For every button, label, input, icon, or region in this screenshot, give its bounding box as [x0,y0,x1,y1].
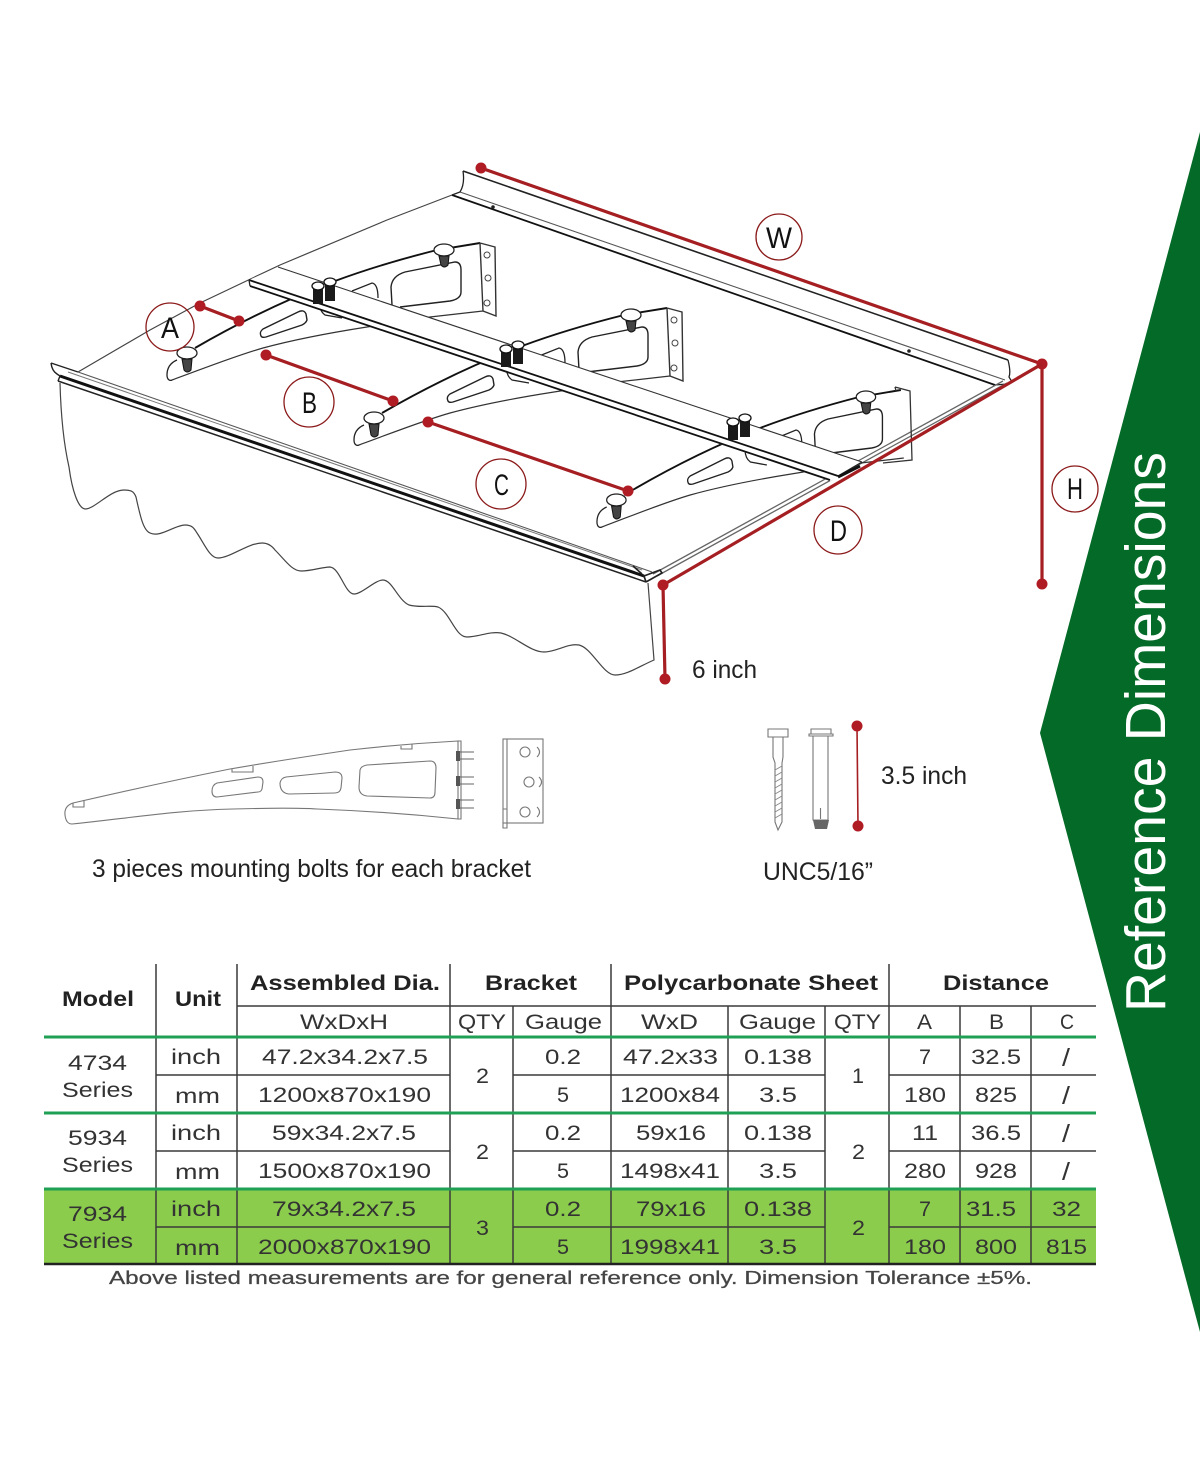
row: 5934 series: 928 [975,1160,1017,1183]
header labels [62,972,1049,1011]
sub-header labels: B [989,1011,1004,1034]
row: 7934 series: 3.5 [759,1236,797,1259]
dimension: 3.5 inch: 3.5 inch [881,762,967,790]
row: 5934 series: / [1062,1158,1070,1186]
dimension C: C [494,469,509,502]
dimension W: W [766,222,793,255]
dimension A [146,300,244,351]
bracket 2 [354,308,683,445]
dimension: 6 inch drop [658,580,757,684]
row: 5934 series: 36.5 [971,1122,1021,1145]
row: 5934 series: 2 [852,1141,865,1164]
dimension B [260,350,398,427]
row: 5934 series: 59x34.2x7.5 [272,1122,416,1145]
row: 4734 series: Series [62,1079,133,1102]
header labels: Unit [175,988,221,1011]
row: 5934 series [62,1120,1070,1186]
dimension A: A [161,312,179,345]
row: 4734 series: 825 [975,1084,1017,1107]
sub-header labels: Gauge [739,1011,816,1034]
row: 4734 series: mm [175,1085,220,1108]
sub-header labels [300,1011,1074,1034]
row: 4734 series: 32.5 [971,1046,1021,1069]
row: 4734 series: 2 [476,1065,489,1088]
rail screws [312,278,751,440]
row: 7934 series: 79x34.2x7.5 [272,1198,416,1221]
row: 4734 series: 0.2 [545,1046,581,1069]
row: 5934 series: 0.138 [744,1122,812,1145]
footnote: Above listed measurements are for general reference only. Dimension Tolerance ±5%. [109,1267,1032,1288]
sub-header labels: C [1060,1011,1074,1034]
row: 5934 series: 280 [904,1160,946,1183]
row: 5934 series: inch [171,1122,221,1145]
fastener caption: UNC5/16” [763,858,873,886]
row: 7934 series: Series [62,1230,133,1253]
green row dividers [44,1037,1096,1189]
row: 7934 series [62,1198,1087,1260]
row: 4734 series: / [1062,1082,1070,1110]
row: 7934 series: 2 [852,1217,865,1240]
row: 4734 series: 4734 [68,1052,127,1075]
dimension: 6 inch drop: 6 inch [692,656,757,684]
wavy skirt [60,383,654,675]
row: 5934 series: 1500x870x190 [258,1160,431,1183]
dimension C [422,416,634,509]
row: 7934 series: 31.5 [966,1198,1016,1221]
icon: expansion anchor [809,729,833,829]
header labels: Assembled Dia. [250,972,440,995]
row: 7934 series: 800 [975,1236,1017,1259]
bracket caption: 3 pieces mounting bolts for each bracket [92,855,531,883]
specification table [44,964,1096,1264]
row: 5934 series: 1498x41 [620,1160,720,1183]
row: 5934 series: 2 [476,1141,489,1164]
row: 7934 series: inch [171,1198,221,1221]
row: 4734 series: 1 [852,1065,864,1088]
sub-header labels: WxDxH [300,1011,388,1034]
end view of bracket plate [503,739,543,828]
row: 7934 series: 2000x870x190 [258,1236,431,1259]
sidebar heading: Reference Dimensions [1114,452,1178,1012]
dimension B: B [302,387,317,420]
sub-header labels: WxD [641,1011,698,1034]
row: 4734 series: / [1062,1044,1070,1072]
row: 7934 series: 7 [919,1198,931,1221]
row: 4734 series: 3.5 [759,1084,797,1107]
row: 7934 series: 0.138 [744,1198,812,1221]
row: 5934 series: 5 [557,1160,569,1183]
sub-header labels: Gauge [525,1011,602,1034]
row: 4734 series: 7 [919,1046,931,1069]
row: 4734 series: 47.2x33 [623,1046,718,1069]
row: 7934 series: 7934 [68,1203,127,1226]
row: 5934 series: 5934 [68,1127,127,1150]
wall strip at back of awning [452,171,1012,385]
sub-header labels: QTY [458,1011,506,1034]
sub-header labels: QTY [834,1011,881,1034]
table bottom border [44,1263,1096,1265]
side view of bracket [65,741,474,824]
row: 5934 series: 3.5 [759,1160,797,1183]
row: 4734 series [62,1044,1070,1110]
row: 7934 series: 180 [904,1236,946,1259]
dimension D: D [830,515,847,548]
header labels: Model [62,988,134,1011]
row: 7934 series: 3 [476,1217,489,1240]
row: 4734 series: 5 [557,1084,569,1107]
row: 5934 series: 0.2 [545,1122,581,1145]
dimension D [663,364,1042,585]
icon: lag bolt [768,729,788,830]
row: 7934 series: 79x16 [636,1198,706,1221]
sidebar: green arrow banner [1040,132,1200,1332]
table grid [156,964,1096,1264]
row: 7934 series: 815 [1046,1236,1087,1259]
row: 7934 series: 1998x41 [620,1236,720,1259]
polycarbonate sheet outline [78,195,452,372]
dimension W [476,162,1042,364]
row: 4734 series: 47.2x34.2x7.5 [262,1046,428,1069]
row: 5934 series: / [1062,1120,1070,1148]
row: 5934 series: 11 [912,1122,938,1145]
front rail [51,363,662,582]
row: 4734 series: inch [171,1046,221,1069]
row: 4734 series: 0.138 [744,1046,812,1069]
dimension H [1036,358,1098,590]
row: 7934 series: 5 [557,1236,569,1259]
row: 5934 series: mm [175,1161,220,1184]
bracket 1 [167,243,496,380]
highlighted row background [44,1189,1096,1264]
bracket 3 [597,387,912,527]
row: 4734 series: 1200x870x190 [258,1084,431,1107]
sub-header labels: A [917,1011,932,1034]
header labels: Distance [943,972,1049,995]
row: 4734 series: 1200x84 [620,1084,720,1107]
row: 5934 series: 59x16 [636,1122,706,1145]
dimension H: H [1067,473,1083,506]
row: 5934 series: Series [62,1154,133,1177]
row: 4734 series: 180 [904,1084,946,1107]
crossbar rail and support plate [249,267,862,481]
row: 7934 series: 0.2 [545,1198,581,1221]
main awning diagram [51,171,1012,675]
row: 7934 series: mm [175,1237,220,1260]
header labels: Polycarbonate Sheet [624,972,878,995]
header labels: Bracket [485,972,577,995]
right edge of sheet [653,381,1007,576]
row: 7934 series: 32 [1052,1198,1081,1221]
dimension: 3.5 inch [852,720,967,832]
